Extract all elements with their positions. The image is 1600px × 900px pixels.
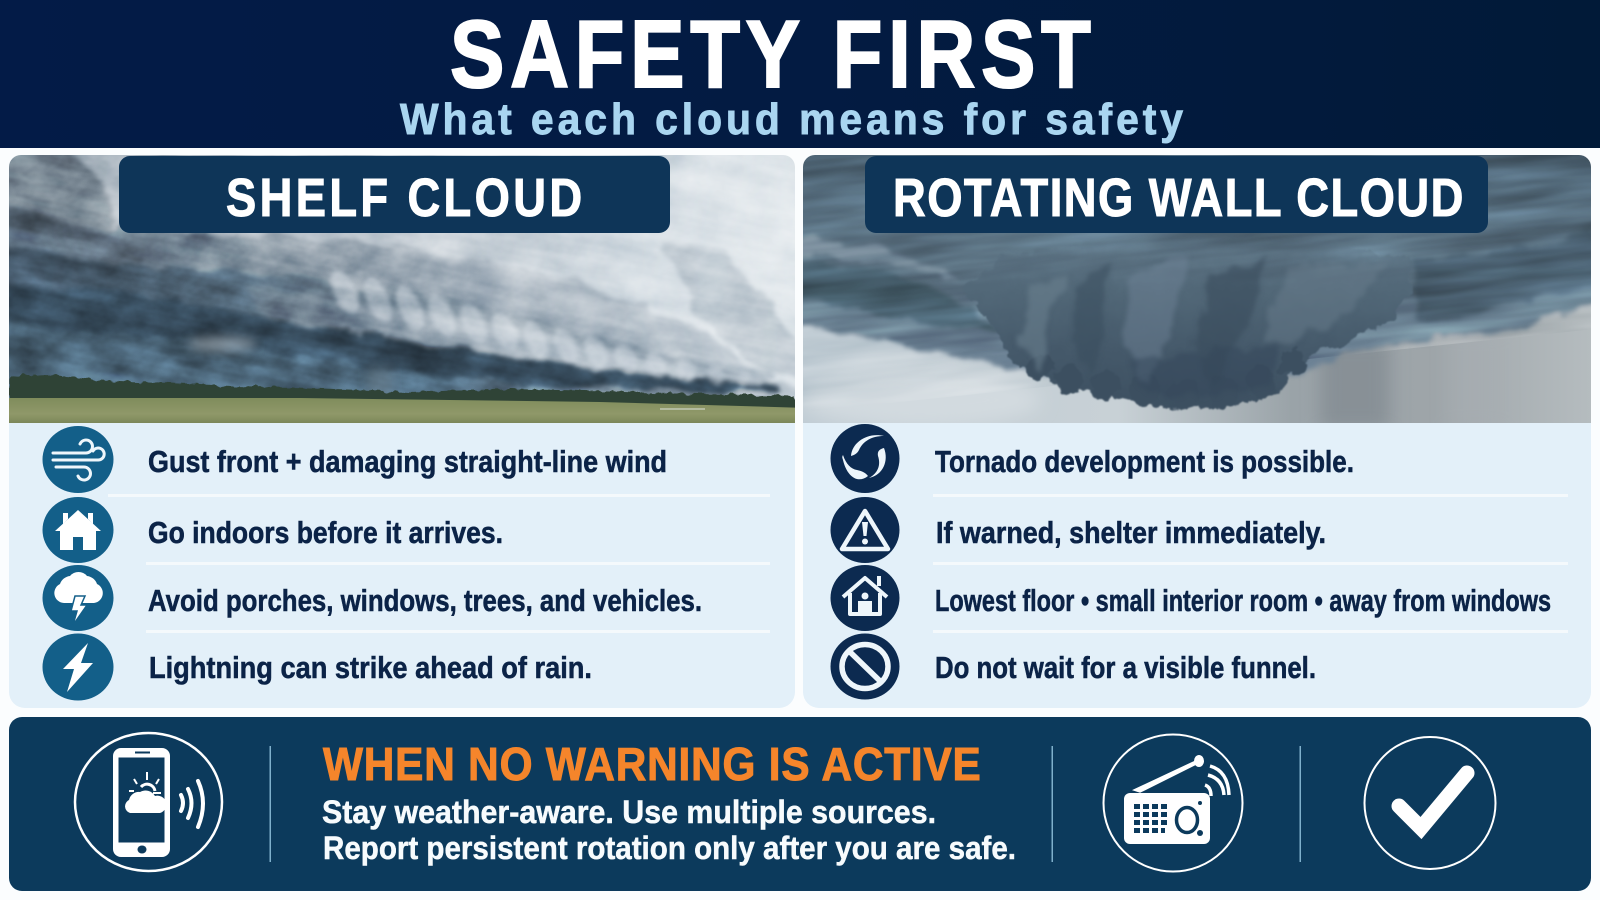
horizon trees and field [9, 373, 795, 423]
photo: rotating wall cloud [803, 155, 1591, 423]
text: stay weather-aware: Stay weather-aware. Use multiple sources. [322, 794, 936, 830]
panel: when no warning is active [9, 717, 1591, 891]
header banner [0, 0, 1600, 148]
subtitle: What each cloud means for safety [400, 96, 1183, 144]
title: SAFETY FIRST [450, 0, 1091, 107]
text: lightning: Lightning can strike ahead of rain. [149, 650, 592, 685]
panel background: shelf cloud [9, 400, 795, 708]
divider [1052, 746, 1053, 862]
text: avoid porches: Avoid porches, windows, trees, and vehicles. [148, 583, 702, 618]
icon: house [42, 497, 114, 563]
icon: storm cloud [42, 565, 114, 631]
row dividers: shelf cloud [108, 494, 770, 633]
icon: wind [42, 426, 114, 493]
row dividers: wall cloud [933, 494, 1568, 633]
icon: lightning bolt [42, 634, 114, 700]
cloud lobes [1016, 256, 1375, 382]
text: go indoors: Go indoors before it arrives. [148, 515, 503, 550]
label: rotating wall cloud: ROTATING WALL CLOUD [893, 167, 1463, 228]
label: shelf cloud: SHELF CLOUD [226, 167, 582, 228]
icon: shelter house [830, 565, 900, 631]
text: gust front: Gust front + damaging straight-line wind [148, 444, 667, 479]
photo: shelf cloud over field [9, 155, 795, 423]
text: report rotation: Report persistent rotation only after you are safe. [323, 830, 1016, 866]
icon: phone with weather [75, 733, 222, 871]
panel background: wall cloud [803, 400, 1591, 708]
text: do not wait: Do not wait for a visible funnel. [935, 650, 1316, 685]
icon: prohibited sign [830, 634, 900, 700]
panel: shelf cloud [9, 155, 795, 708]
icon: warning triangle [830, 497, 900, 563]
icon: rotation swirl [830, 424, 900, 493]
divider [1300, 746, 1301, 862]
divider [270, 746, 271, 862]
icon: check mark [1364, 737, 1496, 869]
text: tornado development: Tornado development is possible. [935, 444, 1354, 479]
label: shelf cloud [119, 156, 670, 233]
heading: WHEN NO WARNING IS ACTIVE [323, 739, 981, 790]
panel: rotating wall cloud [803, 155, 1591, 708]
text: if warned: If warned, shelter immediately. [936, 515, 1326, 550]
icon: weather radio [1104, 734, 1242, 872]
